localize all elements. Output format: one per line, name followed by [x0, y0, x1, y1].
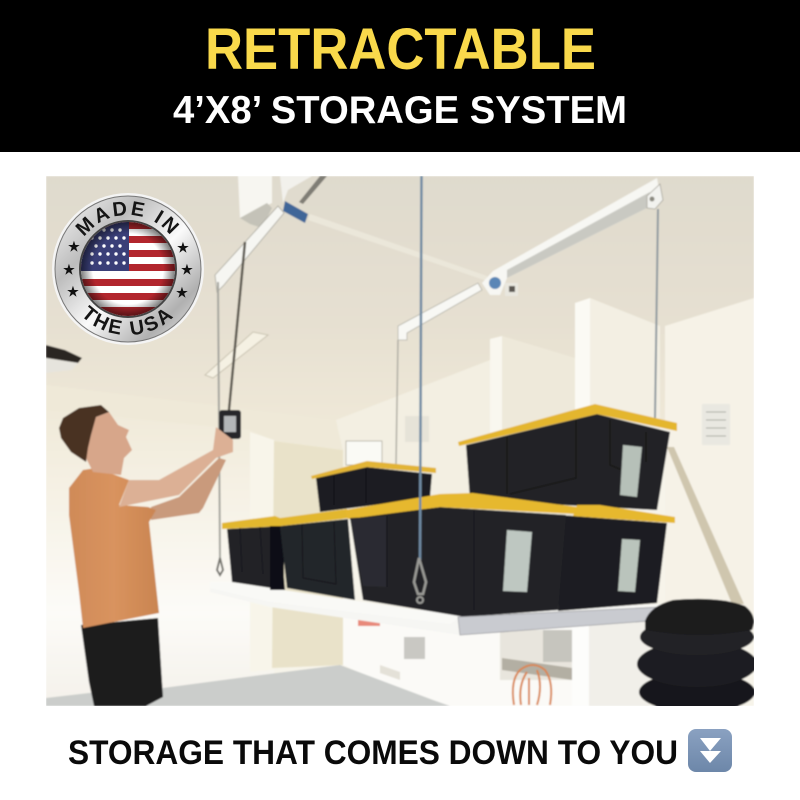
- ceiling rails and pulleys: [215, 176, 663, 340]
- garage door opener: [46, 345, 82, 373]
- rear arm: [151, 458, 226, 520]
- subtitle: storage system: 4’X8’ STORAGE SYSTEM: [173, 89, 627, 132]
- bin: front large: [345, 493, 577, 617]
- icon: double down arrow emoji: [688, 729, 732, 772]
- badge text: made in: MADE IN: [75, 201, 180, 236]
- scene contents: [46, 176, 757, 712]
- extension cord: [513, 665, 551, 705]
- bin: middle left: [273, 509, 355, 600]
- center lifting cable and turnbuckle: [217, 176, 426, 603]
- ceiling beam: [308, 214, 487, 281]
- stacked tires: [637, 599, 757, 712]
- badge stars: ★: [181, 262, 193, 277]
- background lifting cables: [218, 209, 658, 560]
- title: retractable: RETRACTABLE: [205, 17, 596, 82]
- storage shelf platform top: [250, 586, 658, 612]
- badge stars: ★: [176, 285, 188, 300]
- legs and shorts: [81, 618, 163, 706]
- badge stars: ★: [63, 262, 75, 277]
- header band: [0, 0, 800, 152]
- garage photo scene: [46, 176, 754, 706]
- bottom tagline: STORAGE THAT COMES DOWN TO YOU: [68, 734, 678, 772]
- hair: [59, 405, 109, 462]
- front arm: [119, 427, 233, 507]
- badge stars: ★: [177, 240, 189, 255]
- storage shelf front rail: [252, 600, 657, 636]
- bin: small top: [311, 461, 436, 512]
- bin: upper right: [458, 404, 677, 510]
- neck and face: [86, 412, 132, 475]
- bin: right lower: [558, 505, 675, 611]
- badge text: the usa: THE USA: [84, 304, 174, 335]
- product label: [618, 539, 640, 592]
- man pulling cord: [59, 405, 233, 706]
- american flag: [81, 222, 175, 316]
- badge stars: ★: [68, 239, 80, 254]
- garage walls and floor: [46, 176, 754, 706]
- badge stars: [63, 239, 193, 300]
- orange shirt: [69, 468, 159, 628]
- pull rod and control device: [219, 242, 245, 439]
- made in the usa badge: [52, 193, 204, 345]
- badge stars: ★: [67, 284, 79, 299]
- product label: [620, 445, 642, 497]
- product label: [503, 530, 532, 592]
- bin: left: [222, 516, 285, 590]
- storage bins: [222, 404, 677, 617]
- ceiling light: [205, 332, 268, 378]
